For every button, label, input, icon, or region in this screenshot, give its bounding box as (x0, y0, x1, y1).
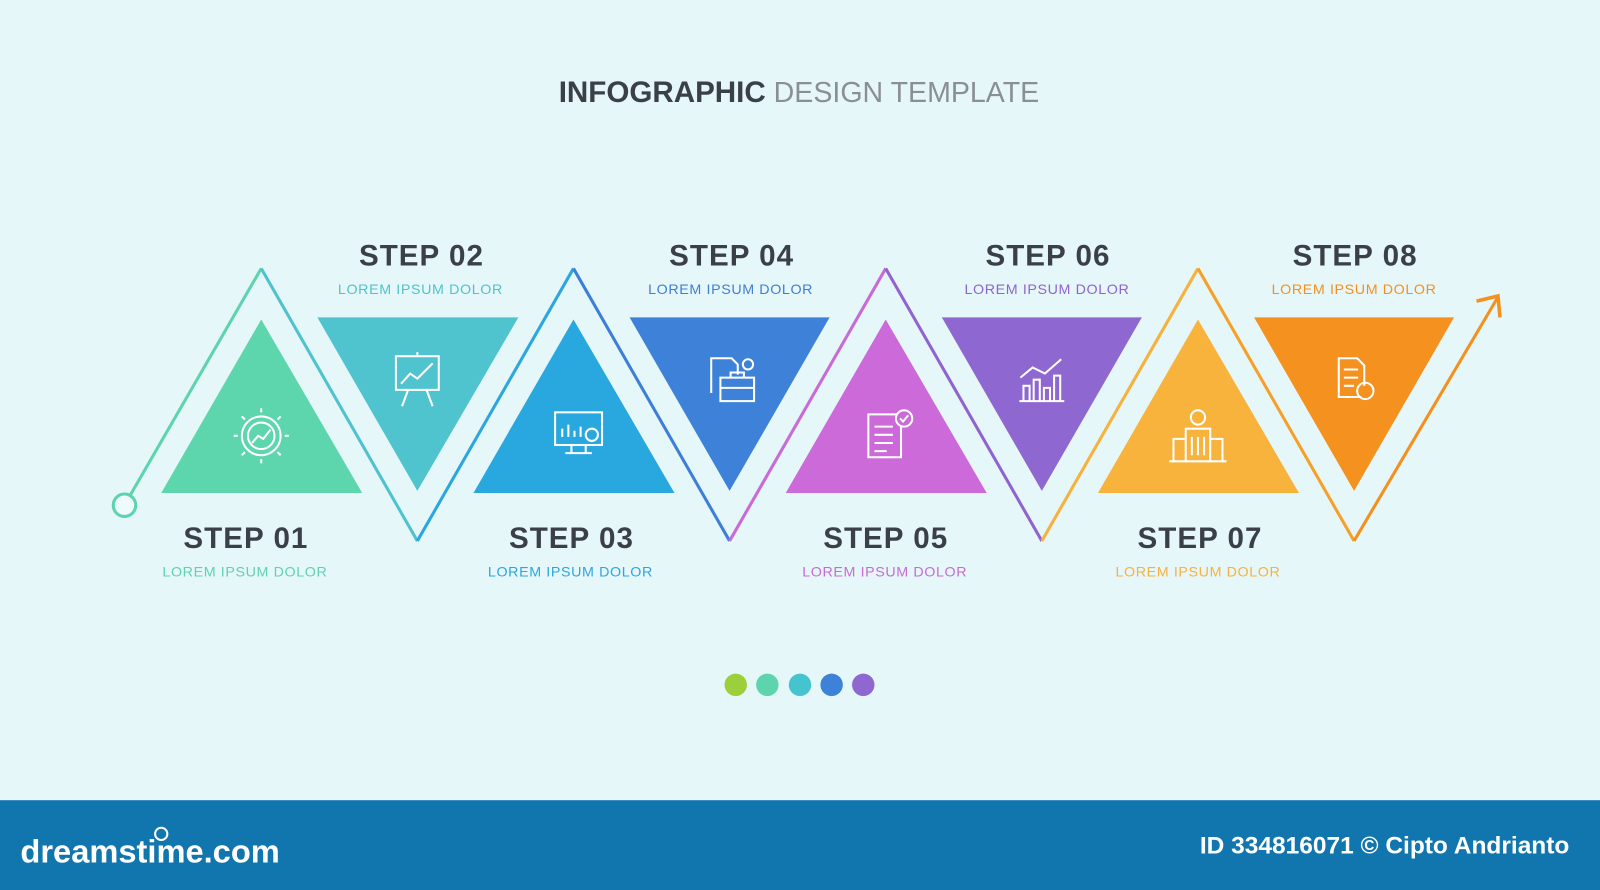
subtitles: LOREM IPSUM DOLOR (1115, 565, 1280, 581)
label: step 07: STEP 07 (1138, 522, 1262, 555)
subtitles: LOREM IPSUM DOLOR (1272, 282, 1437, 298)
subtitles: LOREM IPSUM DOLOR (802, 565, 967, 581)
triangle: step 02 (317, 317, 518, 491)
start circle (113, 494, 136, 516)
triangle: step 08 (1254, 317, 1454, 491)
pagination dots (724, 674, 874, 696)
icon: document check (868, 410, 912, 457)
icon: building coin (1169, 410, 1227, 461)
label: step 03: STEP 03 (509, 522, 634, 555)
icon: presentation board (396, 352, 439, 406)
title: INFOGRAPHIC DESIGN TEMPLATE (559, 76, 1039, 109)
icon: bar chart (1019, 359, 1064, 401)
footer credit: ID 334816071 © Cipto Andrianto (1200, 832, 1569, 859)
triangle: step 04 (630, 317, 830, 491)
label: step 04: STEP 04 (669, 239, 794, 272)
label: step 08: STEP 08 (1293, 239, 1418, 272)
triangle: step 06 (942, 317, 1142, 491)
footer logo: dreamstime.com (20, 832, 280, 869)
zigzag outline path (124, 268, 1498, 541)
icon: monitor analytics (555, 412, 602, 453)
subtitles: LOREM IPSUM DOLOR (162, 565, 327, 581)
footer bar (0, 800, 1600, 890)
step labels (183, 239, 1418, 555)
triangle: step 01 (161, 319, 362, 493)
label: step 06: STEP 06 (985, 239, 1110, 272)
subtitles: LOREM IPSUM DOLOR (648, 282, 813, 298)
triangle: step 05 (786, 319, 987, 493)
subtitles: LOREM IPSUM DOLOR (488, 565, 653, 581)
subtitles: LOREM IPSUM DOLOR (964, 282, 1129, 298)
label: step 02: STEP 02 (359, 239, 484, 272)
label: step 05: STEP 05 (823, 522, 948, 555)
triangle: step 03 (473, 319, 674, 493)
subtitles: LOREM IPSUM DOLOR (338, 282, 503, 298)
arrow head (1477, 296, 1500, 317)
icon: invoice dollar (1339, 358, 1373, 399)
label: step 01: STEP 01 (183, 522, 308, 555)
subtitles (162, 282, 1437, 581)
icon: briefcase docs (711, 358, 754, 401)
triangle: step 07 (1098, 319, 1299, 493)
icon: gear chart (234, 408, 289, 463)
